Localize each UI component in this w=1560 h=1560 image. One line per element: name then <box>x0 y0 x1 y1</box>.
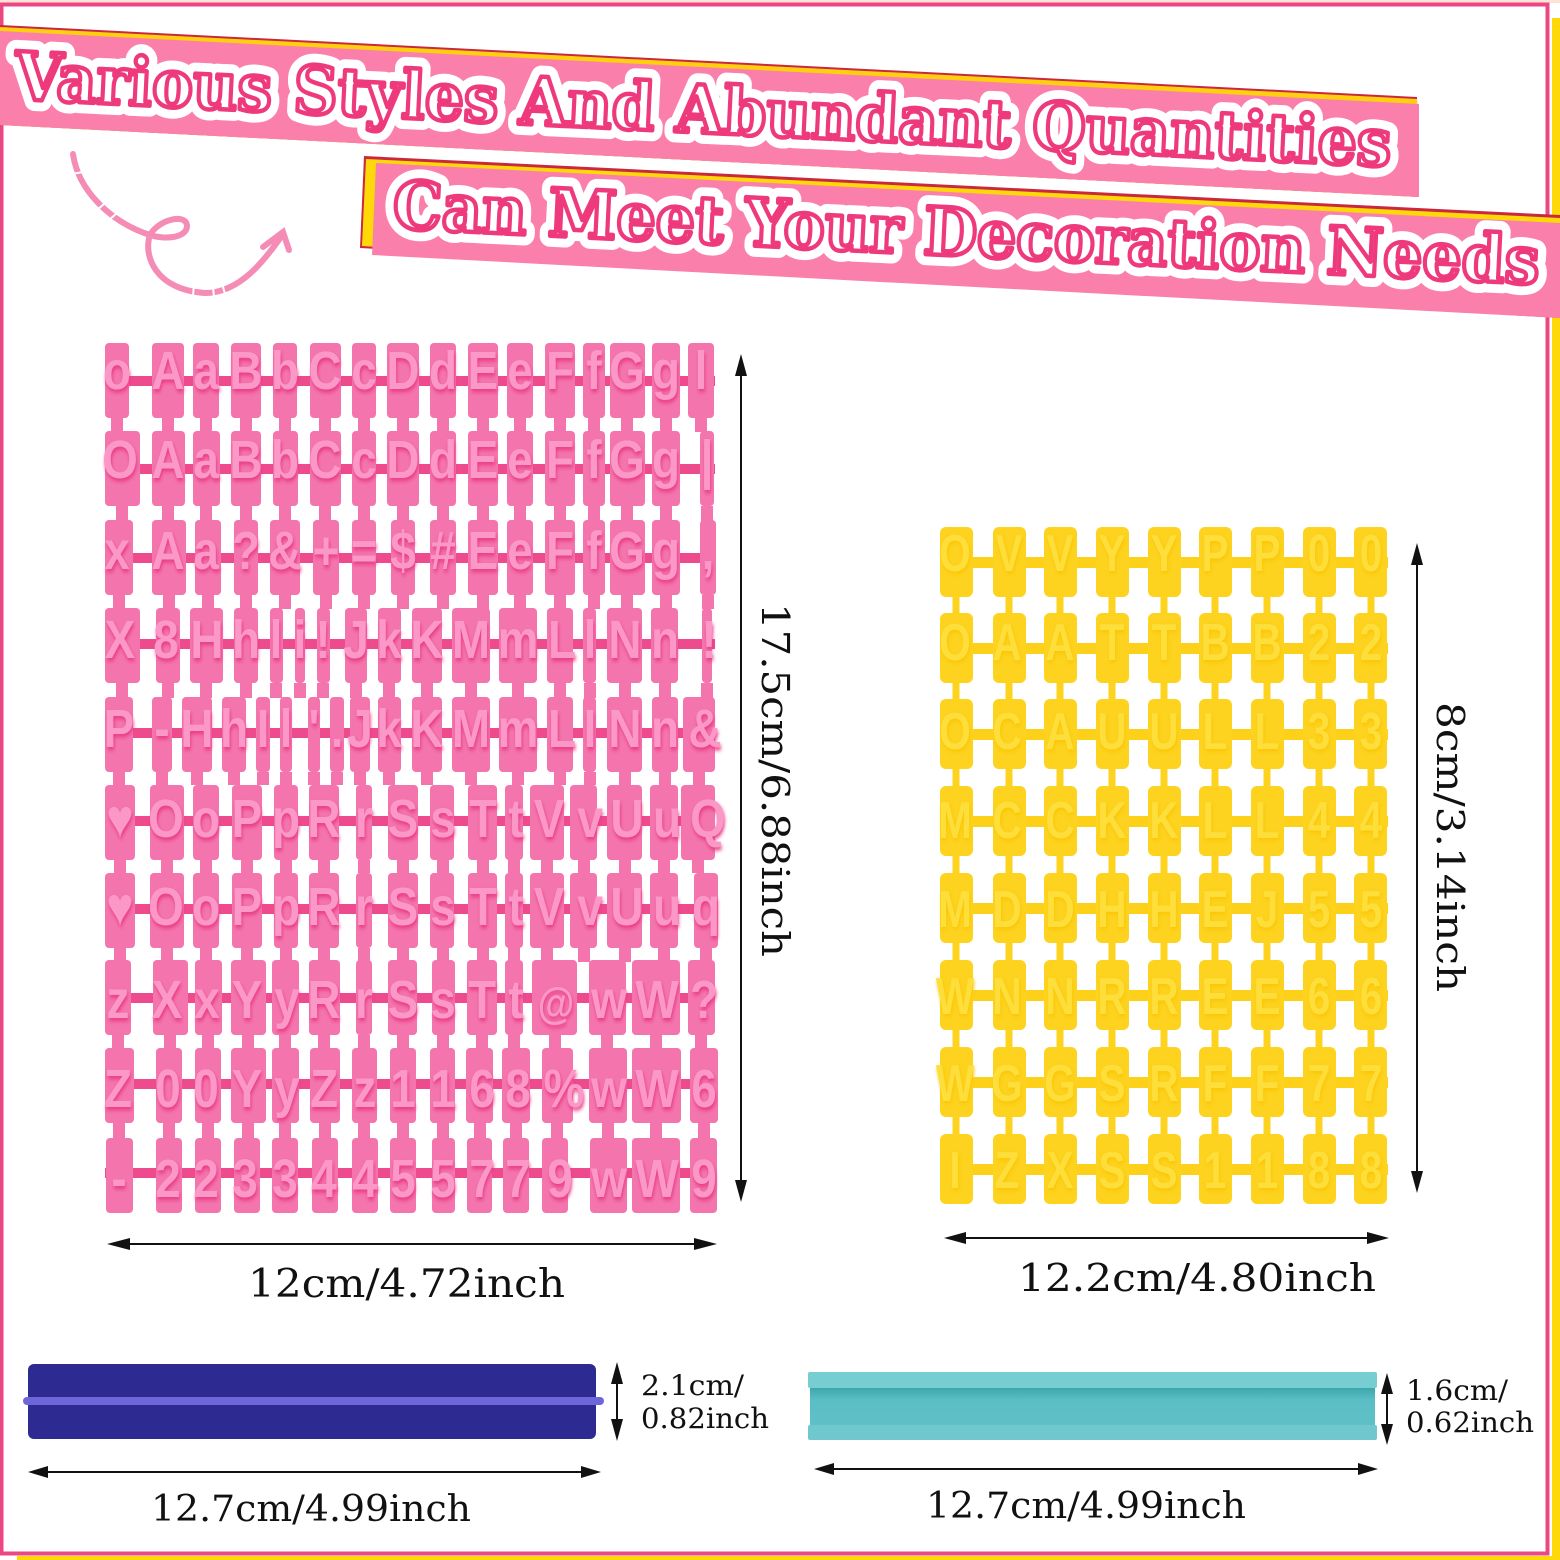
pink row 5: I <box>584 699 596 759</box>
pink row 4: H <box>190 610 224 670</box>
yellow row 6: E <box>1253 967 1281 1025</box>
pink row 6: r <box>355 789 373 849</box>
pink row 7: q <box>692 877 720 937</box>
pink row 1: f <box>586 341 602 401</box>
pink row 3: = <box>351 521 377 581</box>
pink row 2: B <box>229 430 263 490</box>
yellow row 1: 0 <box>1360 524 1382 582</box>
yellow row 2: 2 <box>1308 613 1330 671</box>
pink row 10: 5 <box>430 1149 456 1209</box>
pink row 9: z <box>354 1059 376 1119</box>
pink row 6: O <box>148 789 184 849</box>
label: teal bar height inches: 0.62inch <box>1406 1406 1534 1439</box>
yellow row 4: 4 <box>1308 791 1330 849</box>
pink row 3: A <box>151 521 185 581</box>
pink row 4: X <box>105 610 135 670</box>
pink row 6: p <box>272 789 300 849</box>
pink row 5: H <box>180 699 214 759</box>
pink row 2 <box>102 430 715 521</box>
pink row 3: $ <box>390 521 416 581</box>
pink row 9: y <box>274 1059 300 1119</box>
yellow row 7: G <box>991 1054 1023 1112</box>
pink row 7: V <box>534 877 565 937</box>
yellow row 8: X <box>1046 1141 1074 1199</box>
yellow row 5: 5 <box>1360 880 1382 938</box>
yellow row 7: S <box>1098 1054 1126 1112</box>
pink row 1: a <box>193 341 220 401</box>
pink row 6: s <box>430 789 456 849</box>
pink row 1: e <box>507 341 533 401</box>
yellow row 3: L <box>1203 702 1227 760</box>
yellow row 4: L <box>1203 791 1227 849</box>
pink row 10: W <box>635 1149 679 1209</box>
arrow: teal bar height <box>1381 1373 1393 1445</box>
arrow: blue bar width <box>28 1466 601 1478</box>
pink row 4: ! <box>315 610 331 670</box>
yellow row 6: W <box>936 967 974 1025</box>
yellow row 2: B <box>1200 613 1230 671</box>
pink row 5: l <box>280 699 292 759</box>
yellow row 2: 2 <box>1360 613 1382 671</box>
yellow row 3: U <box>1149 702 1179 760</box>
pink row 5: h <box>220 699 248 759</box>
yellow row 7: F <box>1255 1054 1279 1112</box>
yellow row 2: T <box>1152 613 1176 671</box>
pink row 4: l <box>270 610 282 670</box>
yellow row 4: K <box>1097 791 1127 849</box>
pink row 10: w <box>590 1149 628 1209</box>
pink row 3: G <box>609 521 645 581</box>
pink row 9: 0 <box>193 1059 219 1119</box>
pink row 4: K <box>410 610 444 670</box>
pink row 6 <box>105 785 726 873</box>
pink row 5: ' <box>309 699 319 759</box>
pink row 10: 2 <box>193 1149 219 1209</box>
pink row 3: , <box>702 521 714 581</box>
pink row 2: C <box>308 430 342 490</box>
yellow row 2: B <box>1252 613 1282 671</box>
pink row 1: A <box>151 341 185 401</box>
pink row 1: D <box>386 341 420 401</box>
yellow row 5: D <box>1045 880 1075 938</box>
pink row 8 <box>105 960 718 1048</box>
yellow row 3: A <box>1045 702 1075 760</box>
pink row 4: i <box>294 610 306 670</box>
pink row 1: b <box>271 341 299 401</box>
pink row 5: N <box>608 699 642 759</box>
banner: first headline: Various Styles And Abundant Quantities <box>12 37 1393 182</box>
pink row 6: R <box>307 789 341 849</box>
yellow row 5: H <box>1149 880 1179 938</box>
yellow row 2: T <box>1100 613 1124 671</box>
yellow row 3 <box>939 699 1388 786</box>
yellow row 5: D <box>992 880 1022 938</box>
label: pink set height: 17.5cm/6.88inch <box>753 603 797 957</box>
pink row 2: g <box>652 430 680 490</box>
pink row 4: M <box>452 610 490 670</box>
pink row 8: s <box>430 970 456 1030</box>
yellow row 5 <box>938 873 1388 960</box>
yellow row 3: C <box>992 702 1022 760</box>
pink row 1: o <box>103 341 131 401</box>
pink row 10: - <box>111 1149 127 1209</box>
pink row 10: 9 <box>547 1149 573 1209</box>
pink row 6: T <box>469 789 497 849</box>
yellow row 1: Y <box>1098 524 1126 582</box>
pink row 5: m <box>498 699 538 759</box>
yellow row 4: L <box>1255 791 1279 849</box>
pink row 6: V <box>534 789 565 849</box>
yellow row 8: I <box>949 1141 961 1199</box>
pink row 8: x <box>194 970 220 1030</box>
pink row 6: S <box>388 789 418 849</box>
yellow row 1: P <box>1201 524 1229 582</box>
yellow row 8: Z <box>995 1141 1019 1199</box>
yellow row 7: F <box>1203 1054 1227 1112</box>
pink row 2: a <box>193 430 220 490</box>
pink row 1 <box>103 341 715 432</box>
pink row 9: Z <box>310 1059 338 1119</box>
pink row 10: 9 <box>691 1149 717 1209</box>
pink row 8: w <box>590 970 628 1030</box>
pink row 7: p <box>272 877 300 937</box>
pink row 10: 7 <box>505 1149 531 1209</box>
panel: blue pressing bar <box>23 1364 604 1439</box>
label: yellow set height: 8cm/3.14inch <box>1428 702 1472 992</box>
pink row 2: e <box>507 430 533 490</box>
yellow row 5: 5 <box>1308 880 1330 938</box>
pink row 4: L <box>548 610 576 670</box>
pink row 9: W <box>635 1059 679 1119</box>
pink row 4: J <box>343 610 369 670</box>
pink row 6: o <box>192 789 220 849</box>
yellow row 1: V <box>1046 524 1074 582</box>
yellow row 8 <box>940 1134 1388 1204</box>
yellow row 2: O <box>939 613 971 671</box>
pink row 2: | <box>701 430 713 491</box>
pink row 10: 2 <box>155 1149 181 1209</box>
pink row 4: l <box>584 610 596 670</box>
pink row 1: F <box>546 341 574 401</box>
icon: curly dashed arrow <box>72 154 289 297</box>
yellow row 7: W <box>936 1054 974 1112</box>
pink row 10 <box>105 1138 717 1213</box>
yellow row 7 <box>936 1047 1388 1134</box>
yellow row 4: K <box>1149 791 1179 849</box>
pink row 7: P <box>232 877 262 937</box>
pink row 3: # <box>430 521 456 581</box>
arrow: blue bar height <box>611 1362 623 1441</box>
pink row 2: c <box>351 430 377 490</box>
pink row 2: f <box>586 430 602 490</box>
pink row 5: I <box>257 699 269 759</box>
pink row 8: @ <box>538 978 574 1028</box>
pink row 4: 8 <box>153 610 179 670</box>
pink row 6: P <box>232 789 262 849</box>
pink row 7: ♥ <box>106 877 134 937</box>
pink row 7: v <box>577 877 603 937</box>
pink row 9: Y <box>232 1059 262 1119</box>
label: blue bar height inches: 0.82inch <box>641 1402 769 1435</box>
yellow row 6: 6 <box>1308 967 1330 1025</box>
arrow: pink set height <box>735 354 747 1202</box>
pink row 4 <box>105 608 717 698</box>
pink row 8: z <box>107 970 129 1030</box>
pink row 8: r <box>355 970 373 1030</box>
label: blue bar width: 12.7cm/4.99inch <box>151 1489 471 1530</box>
yellow row 6: E <box>1201 967 1229 1025</box>
pink row 9: 1 <box>390 1059 416 1119</box>
pink row 7: r <box>355 877 373 937</box>
arrow: yellow set width <box>944 1232 1389 1244</box>
yellow row 4: C <box>992 791 1022 849</box>
pink row 2: b <box>271 430 299 490</box>
pink row 6: U <box>610 789 644 849</box>
pink row 8: y <box>274 970 300 1030</box>
pink row 4: k <box>376 610 402 670</box>
yellow row 2: A <box>1045 613 1075 671</box>
pink row 2: D <box>386 430 420 490</box>
yellow row 4: C <box>1045 791 1075 849</box>
pink row 10: 7 <box>469 1149 495 1209</box>
banner: first headline: Various Styles And Abundant Quantities <box>12 37 1393 182</box>
pink row 4: n <box>651 610 679 670</box>
pink row 10: 3 <box>272 1149 298 1209</box>
pink row 5: M <box>452 699 490 759</box>
yellow row 3: 3 <box>1360 702 1382 760</box>
pink row 9: 8 <box>505 1059 531 1119</box>
label: yellow set width: 12.2cm/4.80inch <box>1018 1256 1376 1300</box>
pink row 7: u <box>653 877 681 937</box>
pink row 5: n <box>651 699 679 759</box>
pink row 8: X <box>152 970 182 1030</box>
label: teal bar height: 1.6cm/ <box>1406 1374 1509 1407</box>
yellow row 8: 8 <box>1308 1141 1330 1199</box>
yellow row 2 <box>939 613 1388 699</box>
pink row 3: a <box>193 521 220 581</box>
pink row 2: F <box>546 430 574 490</box>
pink row 1: g <box>652 341 680 401</box>
pink row 9: % <box>544 1059 584 1119</box>
pink row 3 <box>104 520 716 609</box>
pink row 4: N <box>608 610 642 670</box>
label: pink set width: 12cm/4.72inch <box>248 1262 565 1307</box>
pink row 7: s <box>430 877 456 937</box>
panel: teal pressing bar <box>808 1372 1377 1440</box>
yellow row 1: 0 <box>1308 524 1330 582</box>
yellow row 5: M <box>938 880 972 938</box>
pink row 8: T <box>468 970 496 1030</box>
pink row 3: E <box>468 521 498 581</box>
yellow row 7: 7 <box>1360 1054 1382 1112</box>
yellow row 8: 1 <box>1204 1141 1226 1199</box>
pink row 8: Y <box>232 970 262 1030</box>
yellow row 7: G <box>1044 1054 1076 1112</box>
pink row 5: J <box>347 699 373 759</box>
yellow row 1: Y <box>1150 524 1178 582</box>
pink row 5: K <box>410 699 444 759</box>
arrow: yellow set height <box>1411 543 1423 1193</box>
pink row 2: E <box>468 430 498 490</box>
yellow row 3: 3 <box>1308 702 1330 760</box>
yellow row 7: R <box>1149 1054 1179 1112</box>
yellow row 3: L <box>1255 702 1279 760</box>
yellow row 6: R <box>1097 967 1127 1025</box>
yellow row 8: 8 <box>1360 1141 1382 1199</box>
pink row 10: 4 <box>311 1149 337 1209</box>
pink row 6: t <box>508 789 524 849</box>
yellow row 1: V <box>995 524 1023 582</box>
yellow row 8: S <box>1098 1141 1126 1199</box>
panel: yellow letter cutters <box>936 524 1388 1204</box>
pink row 9: 6 <box>469 1059 495 1119</box>
pink row 4: ! <box>701 610 717 670</box>
label: teal bar width: 12.7cm/4.99inch <box>926 1486 1246 1527</box>
yellow row 6: R <box>1149 967 1179 1025</box>
pink row 2: A <box>151 430 185 490</box>
pink row 5: P <box>104 699 134 759</box>
pink row 3: e <box>507 521 533 581</box>
pink row 1: G <box>609 341 645 401</box>
pink row 2: d <box>429 430 457 490</box>
pink row 3: & <box>268 521 302 581</box>
pink row 7: R <box>307 877 341 937</box>
pink row 3: + <box>313 521 339 581</box>
pink row 3: x <box>104 521 130 581</box>
arrow: pink set width <box>107 1238 717 1250</box>
yellow row 3: O <box>939 702 971 760</box>
pink row 7 <box>105 873 720 962</box>
pink row 5: - <box>154 699 170 759</box>
pink row 9: 6 <box>691 1059 717 1119</box>
pink row 8: t <box>508 970 524 1030</box>
pink row 7: O <box>148 877 184 937</box>
pink row 1: B <box>229 341 263 401</box>
pink row 1: d <box>429 341 457 401</box>
yellow row 4 <box>938 786 1388 873</box>
yellow row 4: 4 <box>1360 791 1382 849</box>
pink row 5: k <box>376 699 402 759</box>
yellow row 5: H <box>1097 880 1127 938</box>
pink row 7: S <box>388 877 418 937</box>
yellow row 8: 1 <box>1256 1141 1278 1199</box>
pink row 7: t <box>508 877 524 937</box>
yellow row 3: U <box>1097 702 1127 760</box>
yellow row 6: N <box>992 967 1022 1025</box>
yellow row 8: S <box>1150 1141 1178 1199</box>
yellow row 6: 6 <box>1360 967 1382 1025</box>
pink row 5: . <box>331 699 343 759</box>
pink row 2: O <box>102 430 138 490</box>
yellow row 6 <box>936 960 1388 1047</box>
pink row 3: f <box>586 521 602 581</box>
pink row 9: w <box>590 1059 628 1119</box>
pink row 9: Z <box>104 1059 132 1119</box>
arrow: teal bar width <box>814 1463 1378 1475</box>
yellow row 4: M <box>938 791 972 849</box>
yellow row 1 <box>939 524 1388 613</box>
yellow row 1: O <box>939 524 971 582</box>
yellow row 5: E <box>1201 880 1229 938</box>
yellow row 6: N <box>1045 967 1075 1025</box>
yellow row 5: J <box>1256 880 1278 938</box>
pink row 9: 1 <box>430 1059 456 1119</box>
pink row 4: m <box>498 610 538 670</box>
pink row 1: E <box>468 341 498 401</box>
pink row 1: l <box>695 341 707 401</box>
pink row 8: W <box>635 970 679 1030</box>
yellow row 7: 7 <box>1308 1054 1330 1112</box>
panel: pink letter cutters <box>102 341 726 1213</box>
pink row 7: T <box>469 877 497 937</box>
pink row 3: ? <box>232 521 260 581</box>
pink row 6: Q <box>690 789 726 849</box>
pink row 3: F <box>546 521 574 581</box>
label: blue bar height: 2.1cm/ <box>641 1369 745 1402</box>
pink row 8: R <box>307 970 341 1030</box>
pink row 10: 3 <box>232 1149 258 1209</box>
yellow row 2: A <box>992 613 1022 671</box>
pink row 3: g <box>652 521 680 581</box>
pink row 9 <box>104 1048 718 1138</box>
pink row 7: o <box>192 877 220 937</box>
pink row 8: ? <box>690 970 718 1030</box>
pink row 5 <box>104 697 722 785</box>
pink row 5: & <box>688 699 722 759</box>
pink row 1: C <box>308 341 342 401</box>
pink row 6: v <box>577 789 603 849</box>
pink row 1: c <box>351 341 377 401</box>
pink row 6: ♥ <box>106 789 134 849</box>
pink row 4: h <box>232 610 260 670</box>
pink row 10: 4 <box>352 1149 378 1209</box>
pink row 6: u <box>653 789 681 849</box>
pink row 5: L <box>548 699 576 759</box>
pink row 9: 0 <box>155 1059 181 1119</box>
pink row 7: U <box>610 877 644 937</box>
pink row 2: G <box>609 430 645 490</box>
pink row 8: S <box>388 970 418 1030</box>
pink row 10: 5 <box>390 1149 416 1209</box>
yellow row 1: P <box>1253 524 1281 582</box>
